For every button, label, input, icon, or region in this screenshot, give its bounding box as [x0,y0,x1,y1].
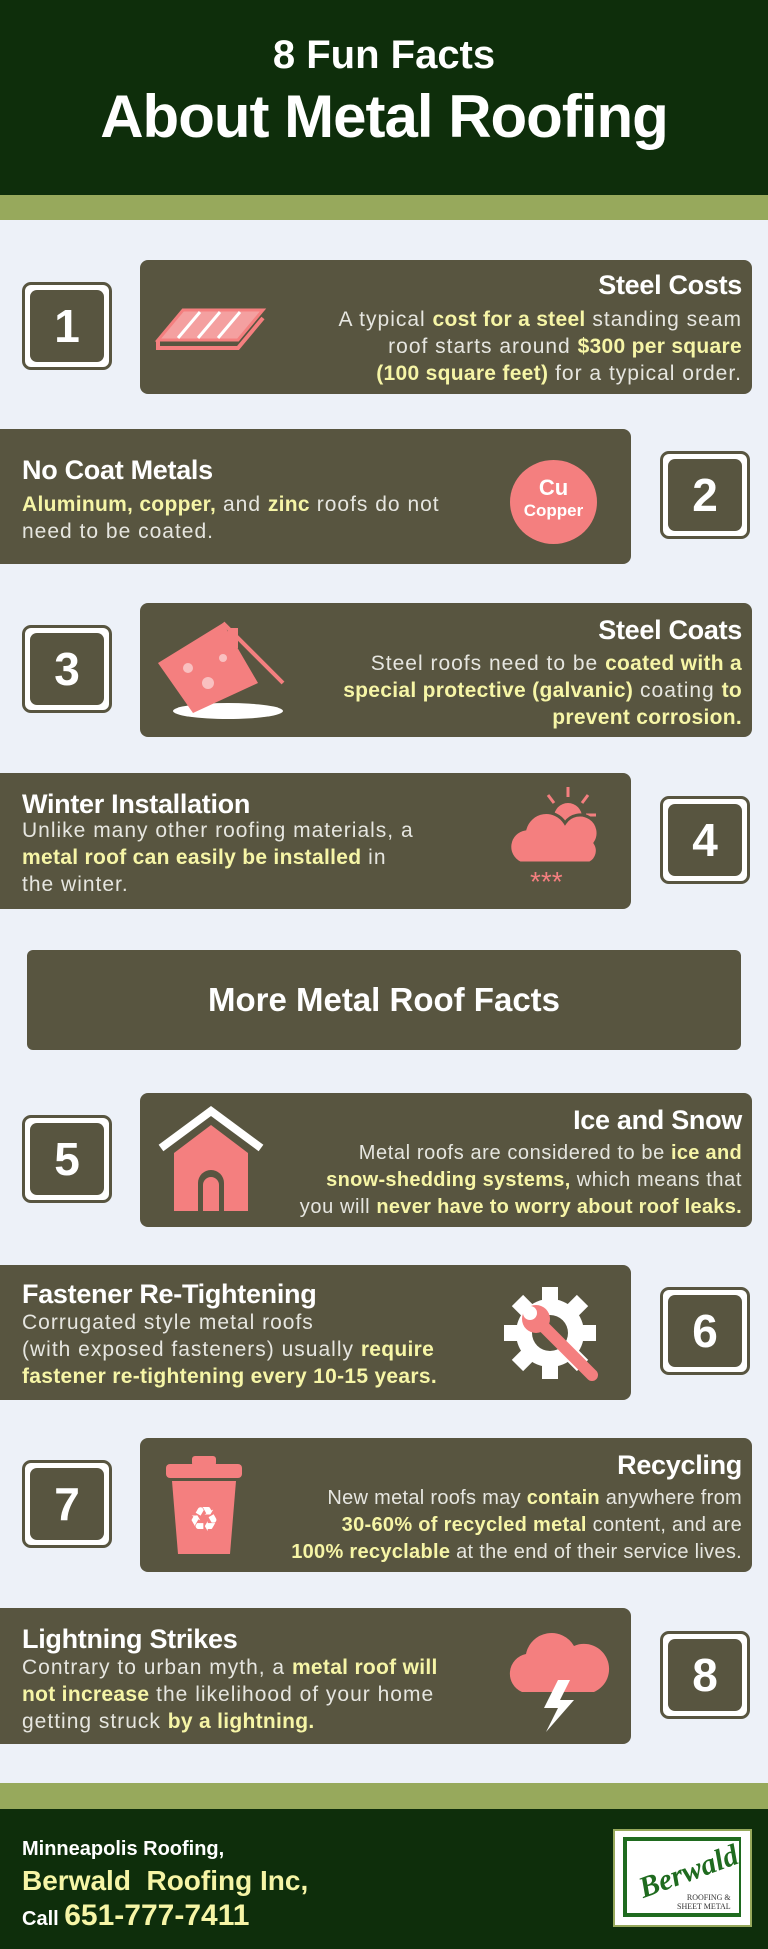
icon: roof panel [154,308,266,350]
fact 3 [22,603,752,737]
text: snow-shedding systems, which means that [326,1169,742,1191]
title: About Metal Roofing [100,83,668,150]
text: metal roof can easily be installed in [22,846,387,869]
text [22,819,414,896]
text: Aluminum, copper, and zinc roofs do not [22,493,440,516]
heading: Steel Costs [598,270,742,300]
number 4 [660,796,750,884]
number 7: 7 [54,1478,80,1530]
number 5: 5 [54,1133,80,1185]
number 5 [22,1115,112,1203]
panel 5 [140,1093,752,1227]
fact 5 [22,1093,752,1227]
footer text [22,1838,308,1932]
heading: Winter Installation [22,789,250,819]
text [291,1487,742,1563]
text: Unlike many other roofing materials, a [22,819,414,842]
text: Steel roofs need to be coated with a [371,652,742,675]
footer text: Minneapolis Roofing, [22,1838,224,1860]
icon: recycle bin: ♻ [189,1500,219,1540]
icon: roof [158,622,284,719]
text: A typical cost for a steel standing seam [338,308,742,331]
text: (100 square feet) for a typical order. [376,362,742,385]
text: fastener re-tightening every 10-15 years. [22,1365,437,1388]
number 6: 6 [692,1305,718,1357]
logo [613,1829,752,1927]
footer [0,1809,768,1949]
text: roof starts around $300 per square [388,335,742,358]
text [22,1656,438,1733]
title [100,33,668,150]
panel 4 [0,773,631,909]
title: 8 Fun Facts [273,33,495,77]
text [338,308,742,385]
text [22,493,440,543]
banner: more facts [27,950,741,1050]
icon: snow cloud: *** [530,866,563,897]
footer text: Call 651-777-7411 [22,1899,249,1932]
icon: copper [510,460,597,544]
logo: SHEET METAL [677,1902,731,1911]
fact 4 [0,773,750,909]
text: 100% recyclable at the end of their service lives. [291,1541,742,1563]
number 3: 3 [54,643,80,695]
fact 6 [0,1265,750,1400]
logo: ROOFING & [687,1893,731,1902]
text [300,1142,742,1218]
text: Contrary to urban myth, a metal roof will [22,1656,438,1679]
text: 30-60% of recycled metal content, and are [342,1514,742,1536]
panel 1 [140,260,752,394]
number 7 [22,1460,112,1548]
text: need to be coated. [22,520,214,543]
number 1 [22,282,112,370]
icon: snow cloud [511,787,597,897]
text: you will never have to worry about roof leaks. [300,1196,742,1218]
text: special protective (galvanic) coating to [343,679,742,702]
fact 1 [22,260,752,394]
text: Metal roofs are considered to be ice and [359,1142,742,1164]
icon: copper: Cu [539,475,568,500]
icon: gear wrench [504,1287,598,1381]
icon: copper: Copper [524,501,583,520]
heading: Fastener Re-Tightening [22,1279,316,1309]
text: the winter. [22,873,129,896]
fact 8 [0,1608,750,1744]
icon: storm cloud [510,1633,610,1732]
icon: house with snow [158,1106,264,1211]
heading: Recycling [617,1450,742,1480]
text: (with exposed fasteners) usually require [22,1338,434,1361]
panel 3 [140,603,752,737]
panel 2 [0,429,631,564]
number 2 [660,451,750,539]
number 8 [660,1631,750,1719]
header [0,0,768,195]
heading: Steel Coats [598,615,742,645]
text: New metal roofs may contain anywhere from [327,1487,742,1509]
number 3 [22,625,112,713]
number 2: 2 [692,469,718,521]
number 8: 8 [692,1649,718,1701]
heading: Ice and Snow [573,1105,742,1135]
text: prevent corrosion. [552,706,742,729]
panel 6 [0,1265,631,1400]
logo: Berwald [634,1838,743,1905]
text [22,1311,437,1388]
number 6 [660,1287,750,1375]
number 1: 1 [54,300,80,352]
heading: No Coat Metals [22,455,213,485]
icon: recycle bin [166,1456,242,1554]
number 4: 4 [692,814,718,866]
banner: more facts: More Metal Roof Facts [208,981,560,1018]
text: not increase the likelihood of your home [22,1683,434,1706]
text [343,652,742,729]
footer text: Berwald Roofing Inc, [22,1865,308,1896]
text: getting struck by a lightning. [22,1710,315,1733]
text: Corrugated style metal roofs [22,1311,314,1334]
heading: Lightning Strikes [22,1624,237,1654]
panel 7 [140,1438,752,1572]
fact 2 [0,429,750,564]
fact 7 [22,1438,752,1572]
panel 8 [0,1608,631,1744]
